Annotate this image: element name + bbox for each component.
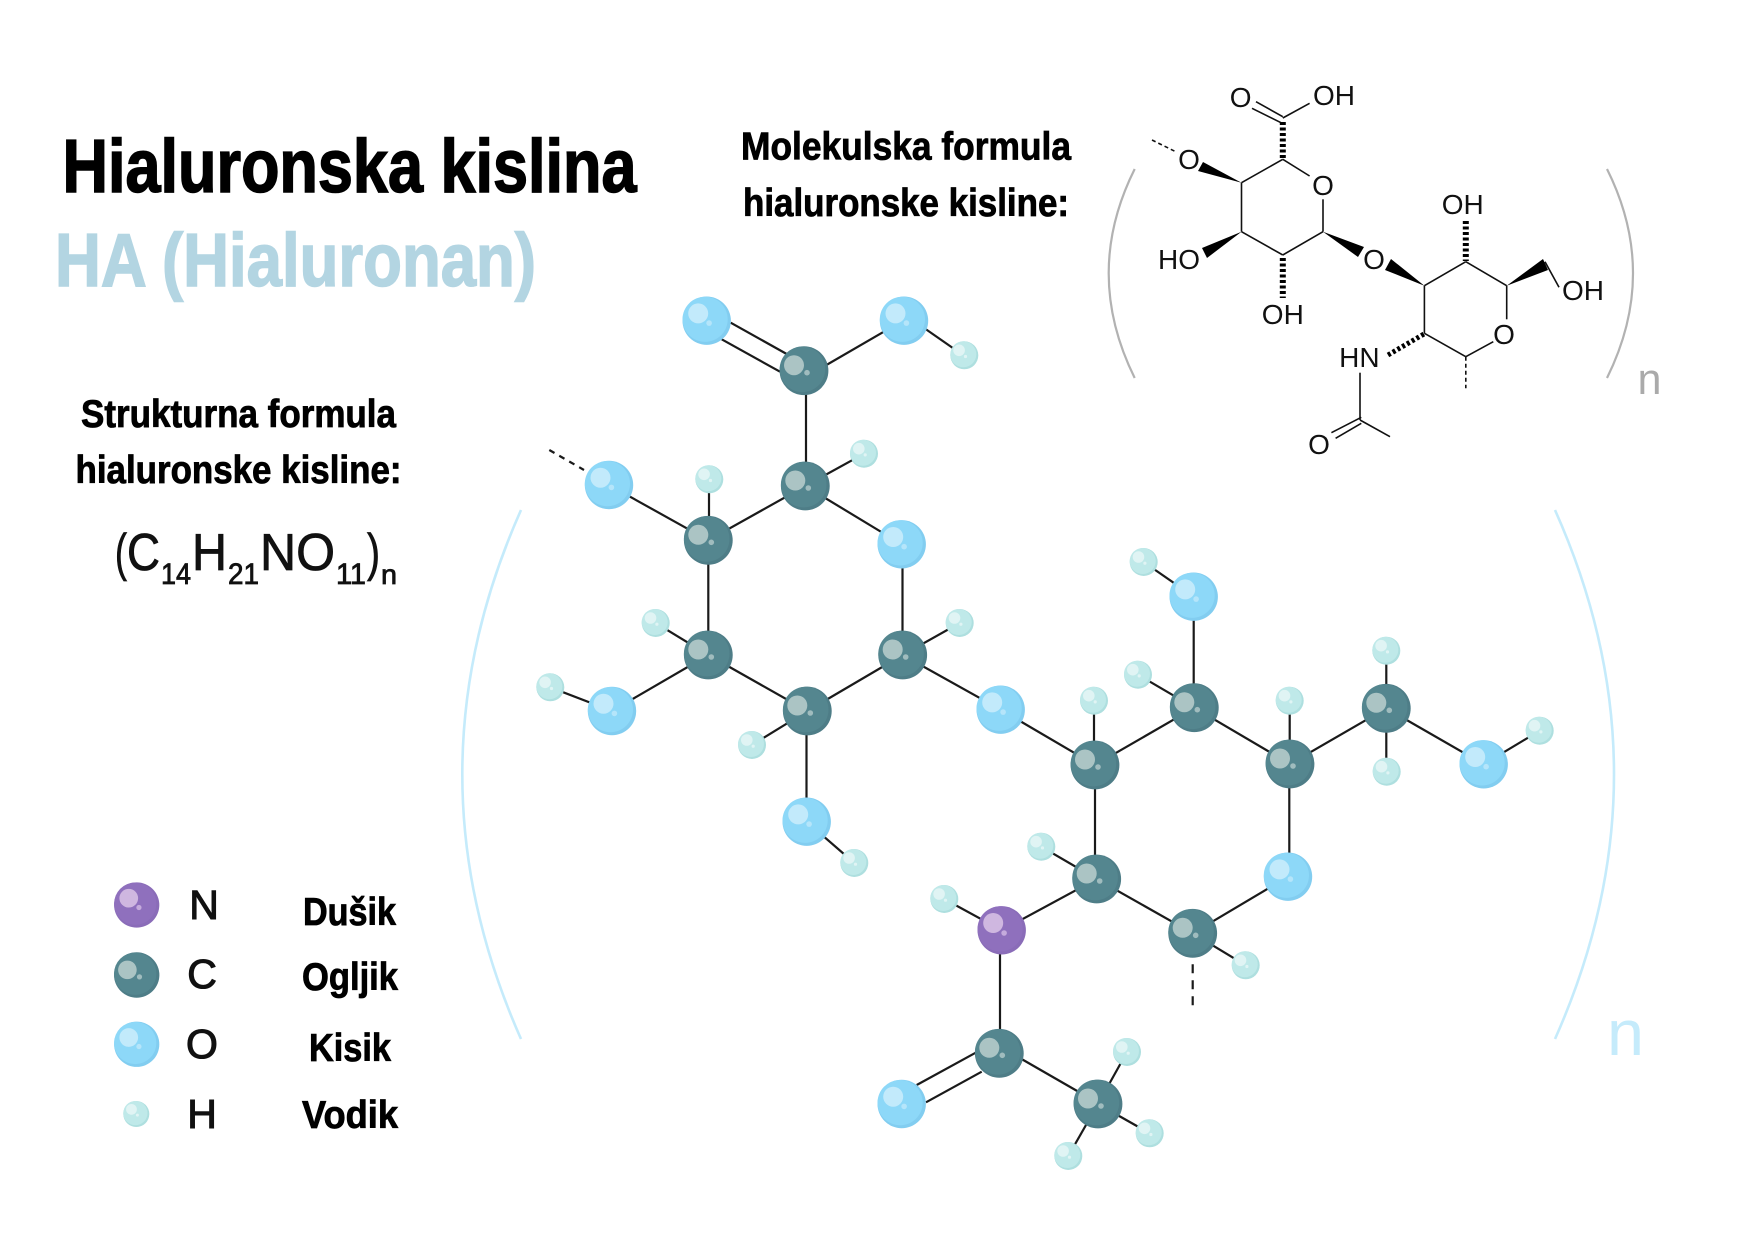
chemical formula: 11 (336, 558, 366, 591)
atom labels: O (1230, 82, 1252, 113)
grey brackets (1109, 169, 1633, 378)
heading: structural formula: hialuronske kisline: (76, 449, 402, 492)
title: Hialuronska kislina (62, 124, 638, 208)
nitrogen atom (978, 906, 1026, 954)
atom labels (1158, 80, 1604, 460)
chemical formula: C (127, 524, 160, 582)
atom labels: O (1308, 429, 1330, 460)
legend: oxygen: Kisik (309, 1027, 391, 1070)
chemical formula: NO (260, 524, 335, 582)
atom labels: OH (1442, 189, 1484, 220)
hashed wedges (1283, 122, 1466, 355)
atom labels: O (1178, 144, 1200, 175)
skeletal formula panel (1109, 80, 1662, 460)
chemical formula: 21 (228, 558, 259, 591)
legend: hydrogen: Vodik (302, 1094, 398, 1137)
legend: carbon (114, 951, 398, 999)
atom labels: OH (1313, 80, 1355, 111)
atom labels: OH (1562, 275, 1604, 306)
bonds (549, 314, 1540, 1156)
legend: nitrogen: Dušik (303, 891, 396, 934)
atom labels: O (1363, 244, 1385, 275)
legend (114, 882, 398, 1137)
chemical formula: ( (115, 524, 127, 582)
skeletal bonds (1152, 102, 1559, 438)
legend: nitrogen: N (189, 882, 219, 928)
oxygen atoms (585, 296, 1508, 1128)
chemical formula: 14 (161, 558, 191, 591)
hydrogen atoms (536, 341, 1554, 1170)
heading: molecular formula: hialuronske kisline: (743, 182, 1069, 225)
legend: carbon: Ogljik (302, 956, 398, 999)
pale blue brackets (462, 510, 1614, 1039)
heading: molecular formula (741, 126, 1071, 225)
legend: oxygen: O (186, 1021, 218, 1067)
solid wedges (1198, 162, 1548, 286)
heading: molecular formula: Molekulska formula (741, 126, 1071, 168)
subtitle: HA (Hialuronan): HA (Hialuronan) (55, 218, 536, 302)
legend: oxygen (114, 1021, 391, 1070)
legend: hydrogen: H (187, 1091, 217, 1137)
carbon atoms (684, 346, 1411, 1128)
chemical formula: H (192, 524, 227, 582)
legend: carbon: C (187, 951, 217, 997)
chemical formula: n (381, 559, 397, 590)
atom labels: HO (1158, 244, 1200, 275)
heading: structural formula: Strukturna formula (81, 393, 396, 436)
atom labels: O (1493, 319, 1515, 350)
repeat index n, grey: n (1638, 355, 1662, 404)
legend: nitrogen (114, 882, 396, 934)
atom labels: O (1312, 170, 1334, 201)
atom labels: OH (1262, 299, 1304, 330)
chemical formula: ) (367, 524, 380, 582)
ball-and-stick molecule (536, 296, 1554, 1170)
heading: structural formula (76, 393, 402, 492)
atom labels: HN (1339, 342, 1380, 373)
chemical formula (115, 524, 397, 591)
repeat index n, pale blue: n (1607, 997, 1644, 1069)
legend: hydrogen (123, 1091, 398, 1137)
